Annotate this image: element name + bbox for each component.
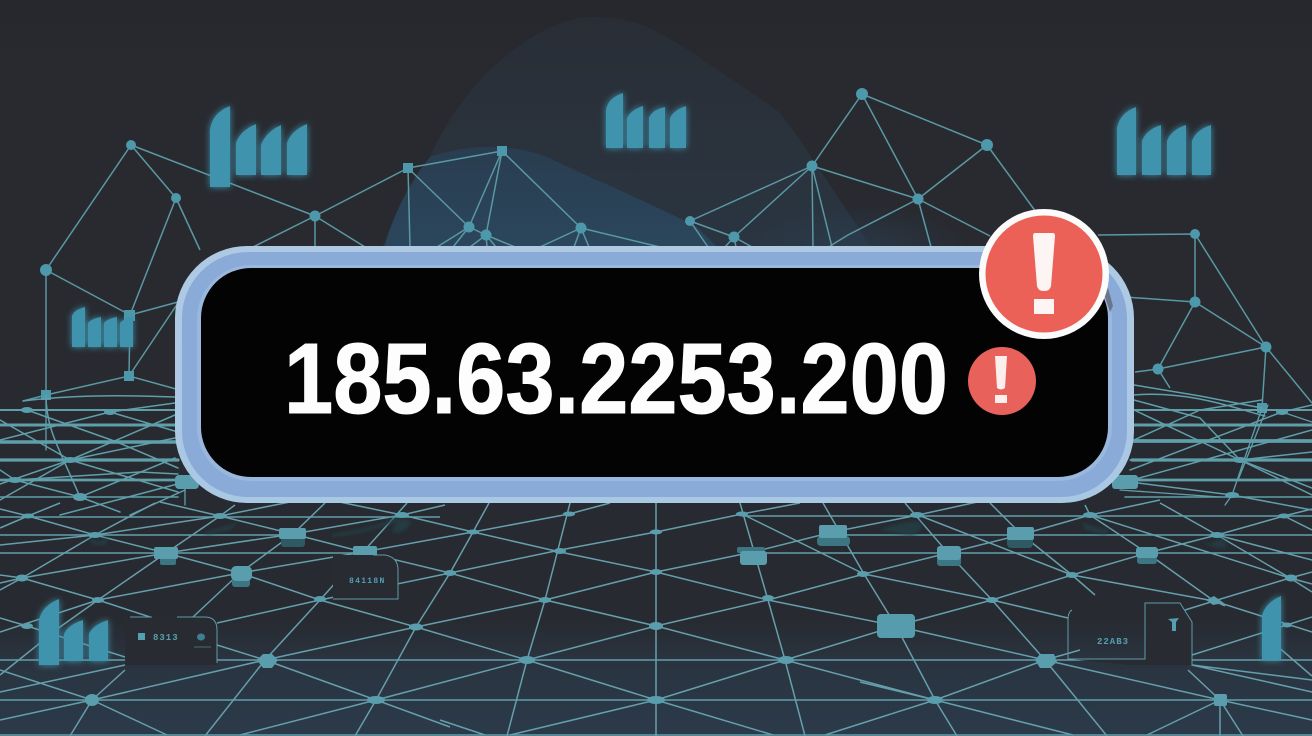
card: upper left device: 84118N <box>349 577 386 586</box>
card: lower left device: 8313 <box>153 633 179 643</box>
IP address: 185.63.2253.200 <box>284 323 948 435</box>
card: lower right device <box>1068 603 1192 665</box>
ground grid: falling lines <box>0 500 1312 735</box>
bar icon: top left <box>210 106 307 187</box>
upper network nodes <box>40 88 1272 413</box>
bar icon: top centre <box>606 93 686 148</box>
card: lower left device <box>125 617 217 665</box>
bar icon: top right <box>1117 107 1211 175</box>
ground grid: horizontal lines <box>0 516 1312 735</box>
ground grid: perspective lines <box>0 503 1312 736</box>
address panel <box>175 246 1134 503</box>
background glow behind panel <box>750 205 970 295</box>
bar icon: bottom right <box>1262 596 1281 660</box>
small alert badge <box>968 347 1036 415</box>
side wave lines: right <box>1112 385 1312 510</box>
bar icon: middle left <box>72 307 133 347</box>
card: lower right device: 22AB3 <box>1097 637 1129 647</box>
background hill: inner <box>385 147 716 246</box>
device nodes <box>154 525 1158 638</box>
bar icon: bottom left <box>39 599 108 665</box>
side wave lines: left <box>0 395 199 515</box>
background hill: outer <box>383 17 870 246</box>
faint device shadows <box>88 518 1228 548</box>
panel frame <box>175 246 1134 503</box>
ground grid: rising lines <box>0 497 1312 735</box>
upper network lines <box>23 94 1312 408</box>
large alert badge <box>979 209 1113 339</box>
card: upper left device <box>333 555 398 599</box>
grid nodes <box>16 512 1297 706</box>
